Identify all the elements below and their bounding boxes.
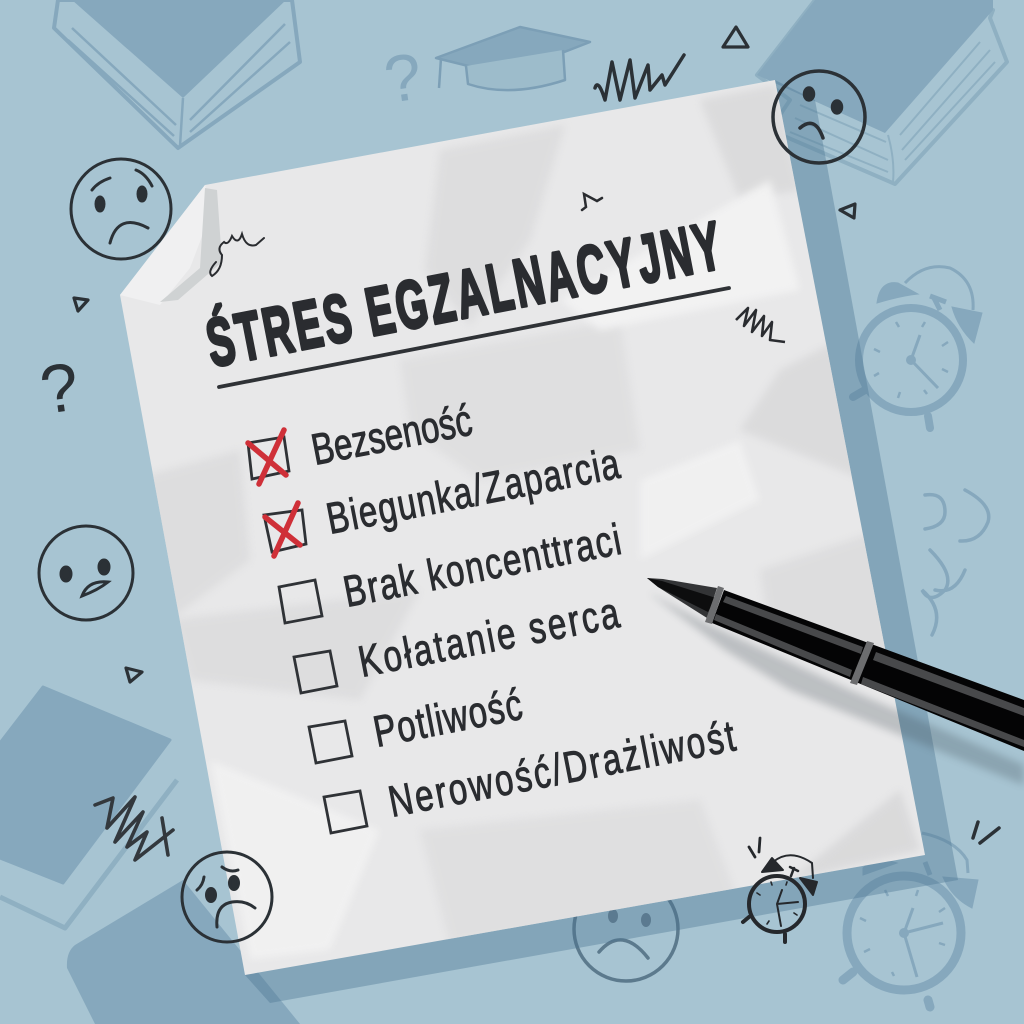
icon: pen (647, 578, 1024, 751)
folded corner (120, 185, 212, 305)
pen shadow (648, 592, 1024, 785)
item: Bezseność (248, 396, 476, 484)
item: Potliwość (309, 681, 526, 763)
background icon: book bottom left (0, 687, 177, 928)
item: Potliwość: Potliwość (370, 681, 526, 757)
item: Kołatanie serca: Kołatanie serca (355, 589, 623, 687)
doodle right of title (736, 308, 785, 342)
panel: paper sheet (120, 80, 925, 975)
sad face: bottom left (182, 852, 272, 942)
sad face: top right (773, 71, 865, 163)
background icon: book top left (54, 0, 300, 148)
doodle near corner (210, 234, 264, 276)
icon: small alarm clock (743, 838, 817, 942)
sad face: bottom under paper (574, 877, 678, 981)
item: Nerowość/Drażliwośt: Nerowość/Drażliwośt (385, 712, 739, 827)
background icon: graduation cap (436, 27, 590, 90)
background scribble right (922, 490, 989, 635)
background icon: alarm clock right (853, 267, 982, 428)
title underline (219, 288, 729, 387)
checklist (248, 396, 739, 833)
sad face: upper left (71, 159, 171, 259)
item: Bezseność: Bezseność (308, 396, 476, 475)
background icon: book bottom centre (67, 880, 300, 1024)
background icon: question mark top: ? (380, 38, 426, 117)
paper shadow (245, 80, 958, 1003)
scribble top (595, 55, 684, 100)
small triangles (74, 27, 855, 682)
doodle top of paper (582, 194, 602, 210)
background icon: book top right (757, 0, 1007, 184)
scribble bottom left (95, 797, 173, 860)
question mark left: ? (36, 348, 84, 429)
background icon: alarm clock bottom right (843, 833, 978, 1007)
ticks bottom right (973, 822, 999, 843)
item: Brak koncenttraci: Brak koncenttraci (340, 516, 625, 617)
title: ŚTRES EGZALNACYJNY (200, 206, 727, 381)
item: Biegunka/Zaparcia: Biegunka/Zaparcia (323, 440, 624, 544)
sad face: left (39, 526, 133, 620)
paper creases (130, 85, 920, 960)
